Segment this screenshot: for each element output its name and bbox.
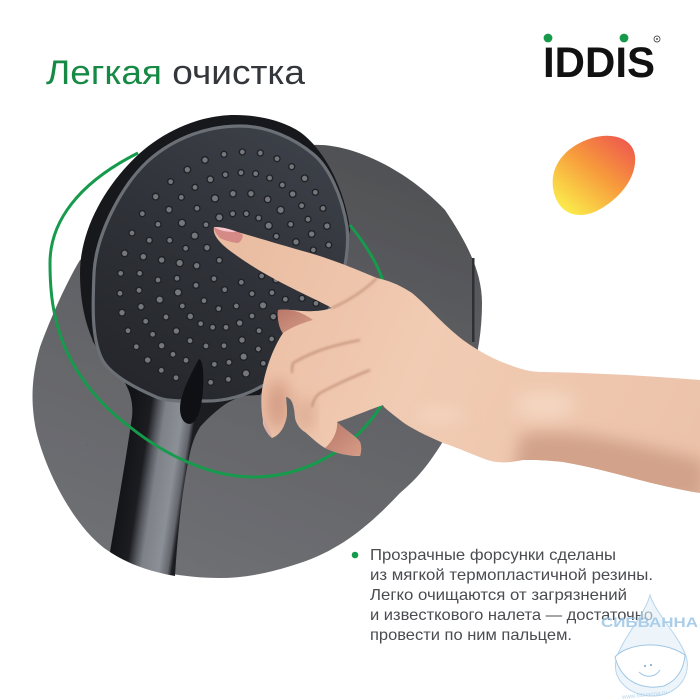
- pointing fingernail: [214, 227, 243, 243]
- curled fingertip: [325, 422, 361, 456]
- watermark: [601, 595, 698, 700]
- description text: [370, 547, 653, 644]
- description text: и известкового налета — достаточно: [370, 607, 653, 624]
- shower handle: [92, 340, 263, 576]
- finger creases: [292, 278, 377, 407]
- description text: из мягкой термопластичной резины.: [370, 567, 653, 584]
- shower head back: [80, 115, 350, 400]
- green ring: [50, 153, 393, 477]
- middle fingertip: [278, 309, 313, 333]
- description text: Легко очищаются от загрязнений: [370, 587, 627, 604]
- skin shading: [266, 380, 700, 500]
- title: Легкая очистка: [46, 54, 306, 92]
- watermark: СИБВАННА: [601, 614, 698, 630]
- description text: Прозрачные форсунки сделаны: [370, 547, 616, 564]
- bullet: [352, 552, 358, 558]
- nozzles: [117, 149, 332, 385]
- orange gradient blob: [553, 136, 635, 215]
- hand: [214, 227, 700, 500]
- stone background blob: [33, 145, 482, 578]
- lower fingernail: [264, 418, 272, 438]
- hook button: [180, 359, 203, 424]
- description text: провести по ним пальцем.: [370, 627, 572, 644]
- logo: IDDIS: IDDIS: [543, 39, 655, 87]
- shower head face: [93, 126, 348, 401]
